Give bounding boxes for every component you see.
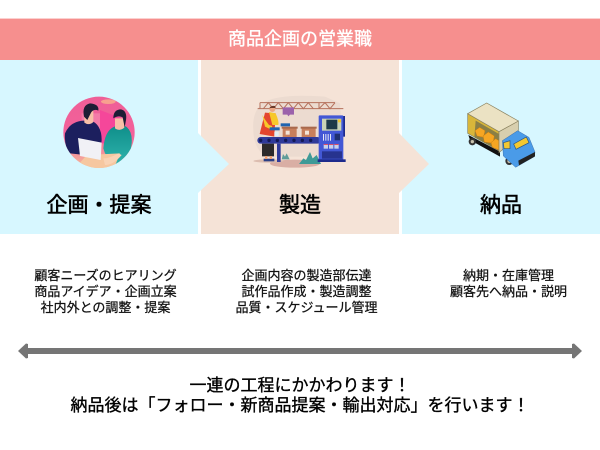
icon: two people at a laptop (63, 96, 135, 168)
truss beam (258, 103, 343, 109)
icon: delivery truck (467, 102, 536, 168)
text block: planning tasks: 社内外との調整・提案 (41, 300, 170, 315)
text block: manufacturing tasks: 企画内容の製造部伝達 (241, 268, 372, 283)
banner: title (0, 18, 600, 60)
shadow ellipses (270, 160, 320, 168)
cargo side panel (499, 121, 518, 153)
text block: manufacturing tasks (235, 268, 378, 315)
text block: delivery tasks: 顧客先へ納品・説明 (450, 284, 567, 299)
truck shadow underside (468, 135, 500, 157)
speech bubble (283, 107, 294, 116)
plants (282, 153, 290, 159)
backdrop blob (253, 96, 343, 157)
parcels (475, 127, 499, 150)
text block: closing message: 納品後は「フォロー・新商品提案・輸出対応」を行います！ (70, 396, 530, 415)
heading: delivery: 納品 (480, 194, 522, 217)
text block: delivery tasks (450, 268, 567, 299)
boxes (283, 128, 297, 137)
control machine (343, 116, 345, 137)
text block: planning tasks: 商品アイデア・企画立案 (34, 284, 177, 299)
text block: manufacturing tasks: 品質・スケジュール管理 (235, 300, 378, 315)
text block: delivery tasks: 納期・在庫管理 (463, 268, 554, 283)
windows (514, 137, 529, 149)
text block: planning tasks: 顧客ニーズのヒアリング (34, 268, 177, 283)
bumper (518, 152, 535, 165)
text block: planning tasks (34, 268, 177, 315)
title text: 商品企画の営業職 (228, 29, 372, 49)
panel: manufacturing background (201, 60, 429, 234)
heading: planning: 企画・提案 (46, 194, 152, 217)
arrow: double-headed process line (18, 344, 582, 358)
panel backgrounds and chevrons (0, 60, 600, 234)
panel: planning background with arrow (0, 60, 229, 234)
icon: factory conveyor with worker (254, 96, 346, 168)
conveyor (257, 137, 321, 144)
text block: closing message: 一連の工程にかかわります！ (190, 376, 410, 395)
text block: closing message (70, 376, 530, 415)
heading: manufacturing: 製造 (279, 194, 321, 217)
cargo interior (468, 114, 499, 151)
panel: delivery background (402, 60, 600, 234)
text block: manufacturing tasks: 試作品作成・製造調整 (241, 284, 372, 299)
cab (502, 131, 535, 167)
cargo roof (468, 103, 518, 132)
wheels (469, 138, 476, 145)
worker (262, 144, 274, 156)
